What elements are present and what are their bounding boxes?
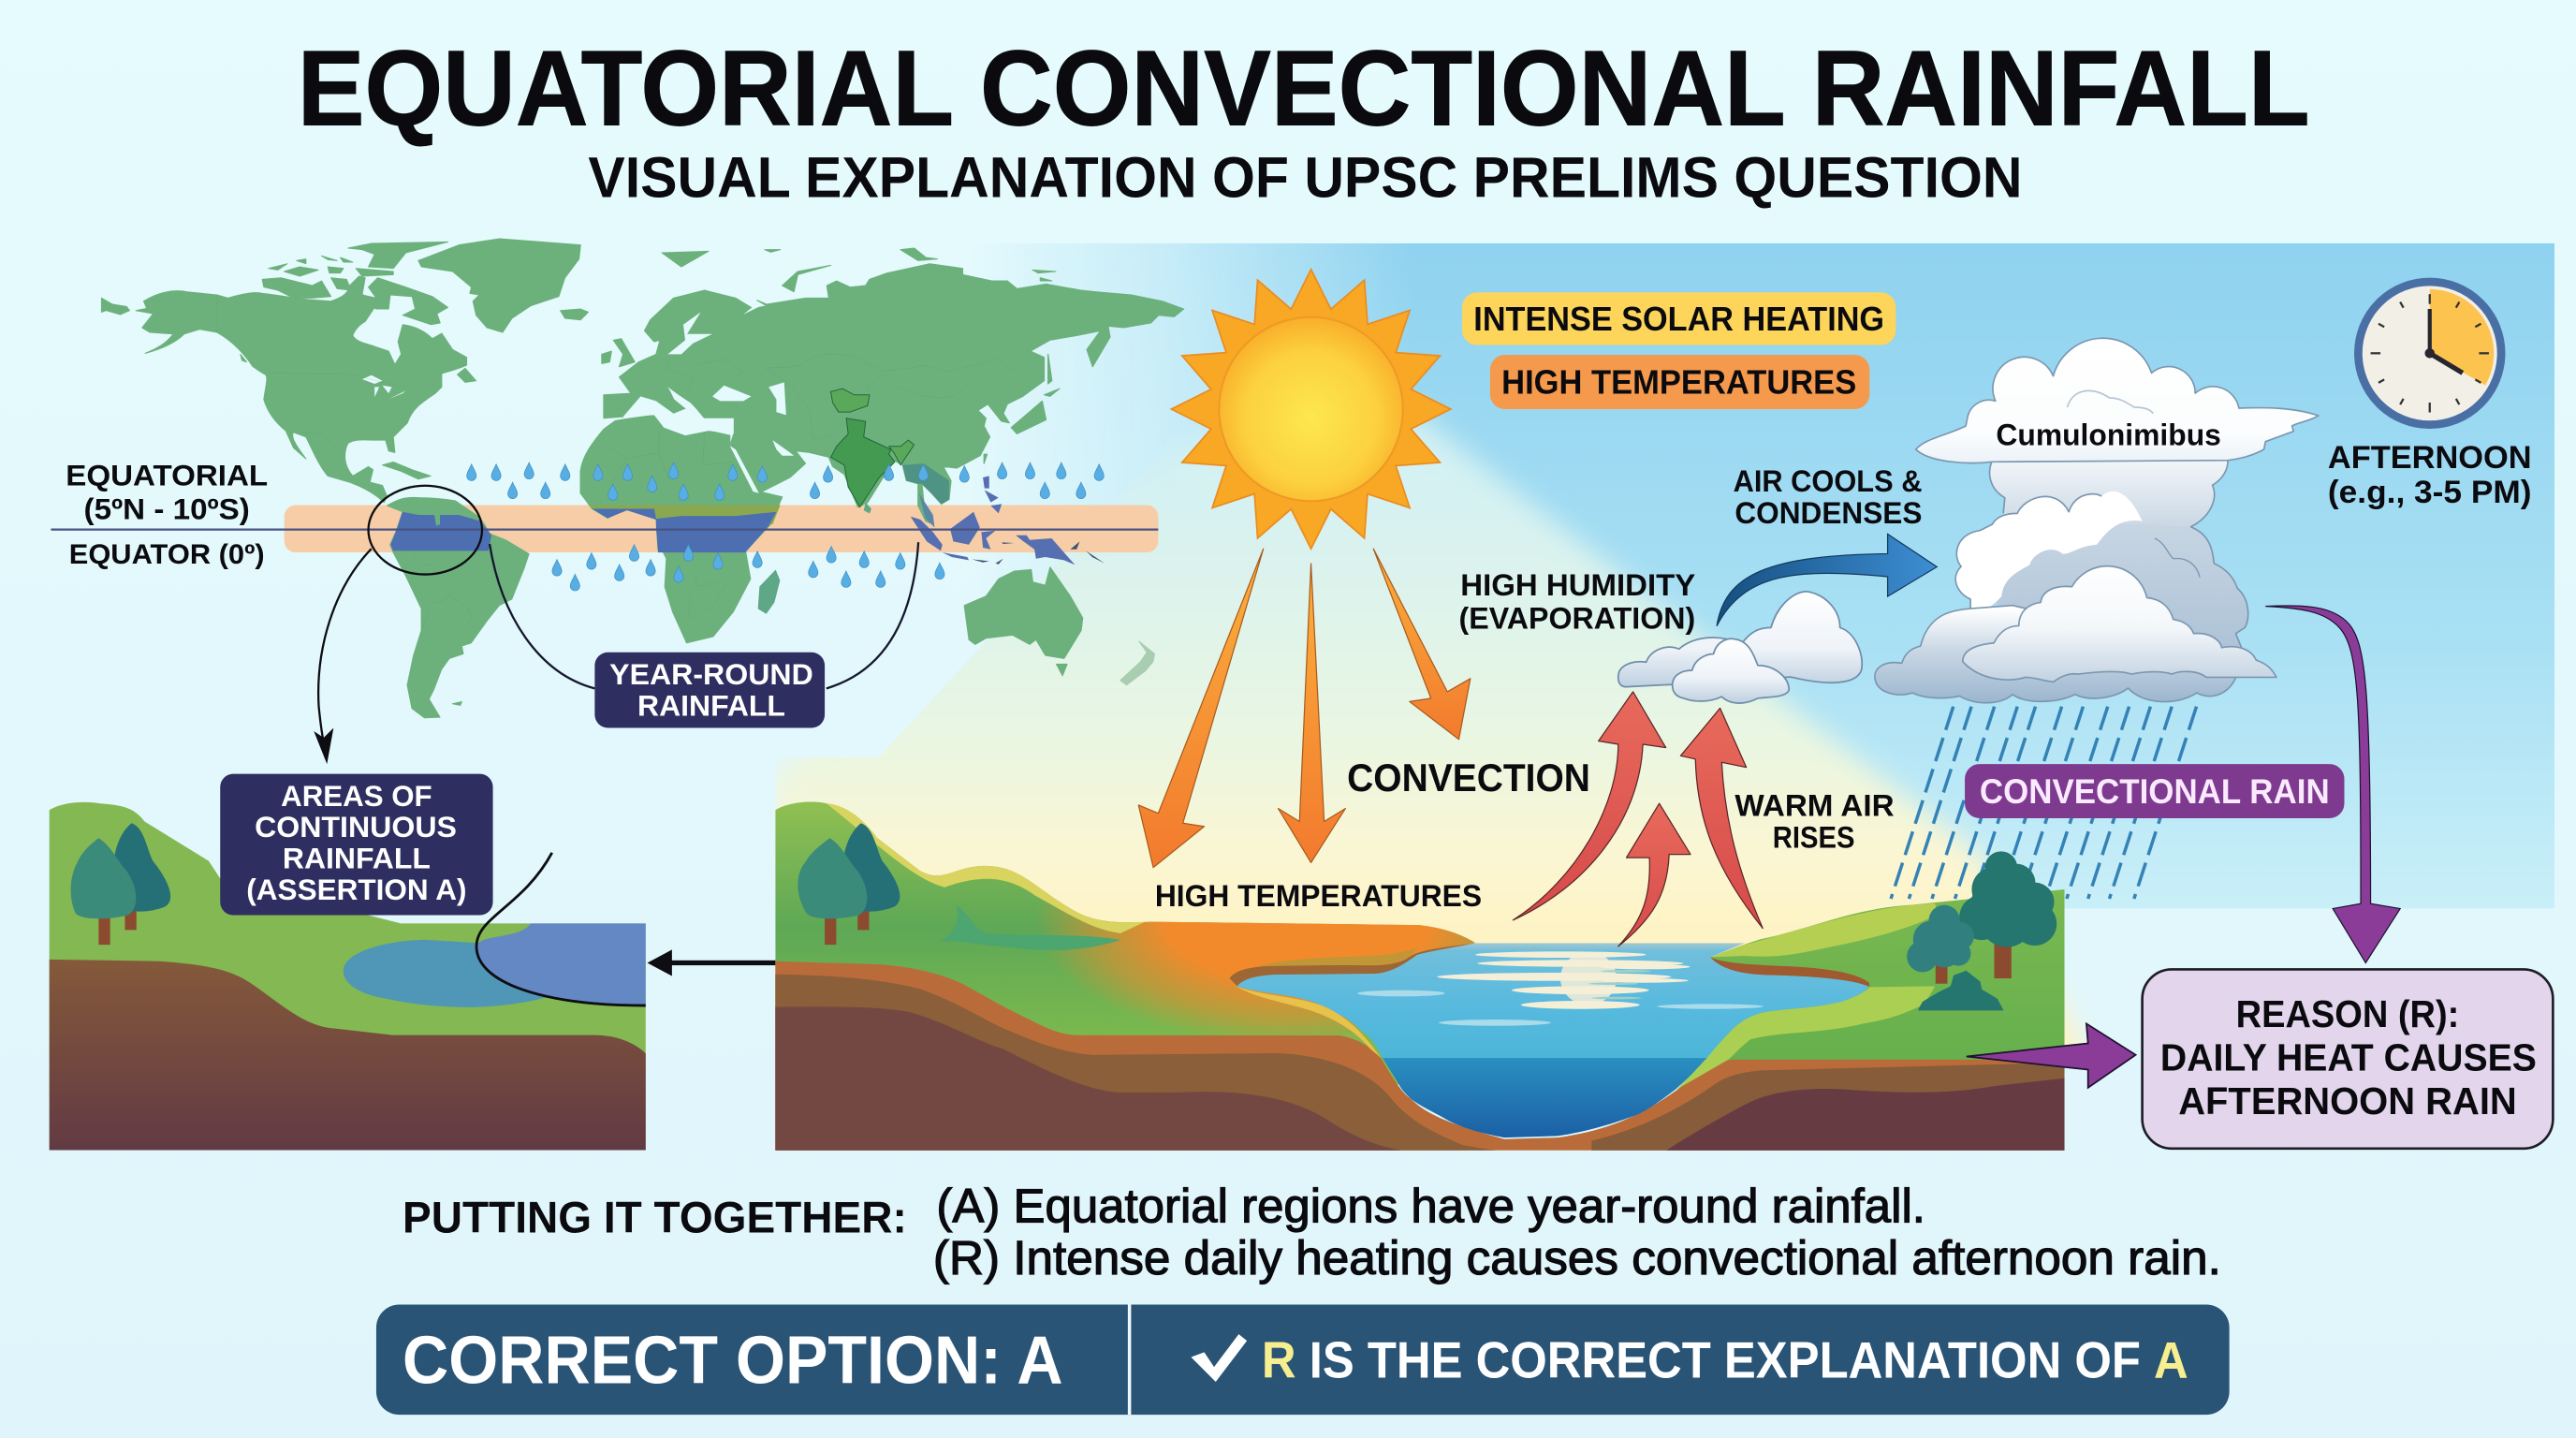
left land — [775, 802, 1474, 1084]
equatorial label — [66, 459, 268, 526]
clock — [2358, 282, 2501, 425]
summary statements: (R) Intense daily heating causes convectional afternoon rain. — [933, 1231, 2221, 1284]
hill yellow rim — [827, 803, 1145, 933]
high temperatures pill — [1490, 355, 1869, 409]
arrow: landscape to reason — [1967, 1023, 2136, 1088]
australia and new zealand — [964, 567, 1154, 685]
afternoon label: (e.g., 3-5 PM) — [2328, 475, 2532, 510]
reason box: REASON (R): — [2236, 992, 2459, 1035]
reason box — [2143, 969, 2553, 1149]
south america — [387, 497, 780, 718]
reflection gaps and pale glints — [1357, 970, 1764, 1026]
warm air label: RISES — [1773, 821, 1854, 855]
cumulonimbus label: Cumulonimibus — [1996, 418, 2221, 452]
far bank lower highlight — [1676, 986, 1935, 1090]
amazon highlight circle — [369, 486, 482, 575]
air cools label: AIR COOLS & — [1734, 464, 1922, 498]
mainland southeast asia tint — [902, 463, 949, 504]
humidity label — [1459, 568, 1696, 635]
world map — [101, 239, 1184, 718]
left soil — [50, 960, 646, 1151]
inland seas — [623, 312, 794, 493]
inset water — [476, 923, 646, 1005]
summary statements — [933, 1180, 2221, 1284]
areas of continuous rainfall box: CONTINUOUS — [255, 810, 457, 844]
reason box: DAILY HEAT CAUSES — [2160, 1035, 2537, 1078]
main landscape — [775, 802, 2065, 1151]
africa band tint — [588, 505, 781, 524]
explanation text: R IS THE CORRECT EXPLANATION OF A — [1262, 1332, 2188, 1389]
equatorial label: (5ºN - 10ºS) — [84, 492, 250, 526]
putting it together label: PUTTING IT TOGETHER: — [402, 1193, 907, 1242]
equator label: EQUATOR (0º) — [69, 539, 265, 570]
sunlight beam — [723, 411, 2095, 1068]
year-round connector curves — [490, 542, 918, 688]
soil band two left — [775, 975, 1495, 1151]
subtitle: VISUAL EXPLANATION OF UPSC PRELIMS QUESTION — [588, 146, 2022, 211]
correct option text: CORRECT OPTION: A — [402, 1324, 1063, 1399]
sky panel — [970, 243, 2554, 909]
soil band one — [775, 961, 2065, 1151]
equatorial rain band — [285, 505, 1158, 552]
lake and right bank — [775, 889, 2065, 1151]
left trees — [798, 823, 900, 945]
rainfall drops — [467, 462, 1104, 591]
year-round rainfall box: YEAR-ROUND — [609, 657, 813, 691]
answer bar — [376, 1304, 2230, 1415]
areas of continuous rainfall box: RAINFALL — [283, 842, 431, 875]
sun — [1171, 270, 1451, 549]
convectional rain pill — [1965, 764, 2344, 818]
dark green streak — [940, 905, 1120, 950]
orange heated ground — [775, 802, 1474, 1084]
soil band three left — [775, 1006, 1401, 1151]
afternoon label — [2328, 440, 2532, 510]
check mark — [1191, 1334, 1247, 1382]
year-round rainfall box — [594, 653, 825, 727]
arrow: cloud to reason — [2265, 606, 2400, 962]
intense solar heating pill — [1462, 292, 1895, 345]
intense solar heating pill: INTENSE SOLAR HEATING — [1473, 300, 1884, 338]
right land — [1682, 889, 2065, 1074]
near bank rim — [1230, 943, 1474, 986]
air cools label: CONDENSES — [1734, 496, 1922, 530]
areas of continuous rainfall box — [220, 774, 493, 916]
far bank rim — [1710, 957, 1869, 987]
india — [830, 389, 915, 507]
small tree — [1907, 905, 1974, 984]
left landscape panel — [50, 802, 646, 1151]
right hill highlight — [1710, 903, 1938, 957]
warm air label: WARM AIR — [1734, 788, 1895, 822]
zoom curve — [476, 853, 646, 1005]
country borders — [217, 295, 1019, 630]
near bank sand rim — [1236, 986, 1381, 1058]
big tree — [1959, 851, 2056, 978]
eurasia and north africa — [580, 248, 1184, 550]
left trees — [71, 823, 170, 945]
high temperatures label: HIGH TEMPERATURES — [1155, 879, 1482, 913]
areas of continuous rainfall box: AREAS OF — [281, 779, 432, 813]
year-round rainfall box: RAINFALL — [637, 688, 785, 722]
right trees — [1907, 851, 2056, 1010]
shrub — [1918, 971, 2003, 1010]
maritime southeast asia — [911, 476, 1105, 565]
afternoon label: AFTERNOON — [2328, 440, 2532, 476]
convection label: CONVECTION — [1347, 756, 1590, 800]
convectional rain pill: CONVECTIONAL RAIN — [1980, 772, 2330, 811]
water — [1236, 943, 1869, 1137]
high temperatures pill: HIGH TEMPERATURES — [1501, 362, 1856, 401]
air cools label — [1734, 464, 1922, 530]
sri lanka — [864, 503, 871, 513]
title: EQUATORIAL CONVECTIONAL RAINFALL — [298, 29, 2310, 148]
reason box: AFTERNOON RAIN — [2178, 1079, 2517, 1123]
small cloud — [1618, 592, 1862, 703]
solar arrows — [1138, 549, 1471, 868]
north america and arctic — [101, 239, 587, 503]
arrow: circle to areas of continuous rainfall — [314, 549, 372, 764]
equatorial label: EQUATORIAL — [66, 459, 268, 492]
soil band two right — [1591, 1063, 2065, 1151]
near bank olive strip — [1258, 948, 1417, 966]
warm air label — [1734, 788, 1895, 855]
arrow: main scene to inset — [648, 949, 775, 976]
amazon rainfall zone — [390, 512, 491, 550]
soil band three right — [1666, 1078, 2065, 1151]
cumulonimbus cloud — [1875, 338, 2319, 703]
areas of continuous rainfall box: (ASSERTION A) — [246, 873, 466, 906]
arrow: air cools — [1717, 534, 1937, 626]
humidity label: (EVAPORATION) — [1459, 601, 1695, 635]
congo rainfall zone — [593, 508, 776, 552]
rain streaks — [1891, 707, 2197, 899]
water reflections — [1437, 951, 1690, 1009]
left lake — [344, 940, 559, 1007]
humidity label: HIGH HUMIDITY — [1460, 568, 1696, 602]
equator line — [51, 529, 1158, 531]
rising air arrows — [1513, 692, 1763, 946]
summary statements: (A) Equatorial regions have year-round rainfall. — [936, 1180, 1925, 1233]
